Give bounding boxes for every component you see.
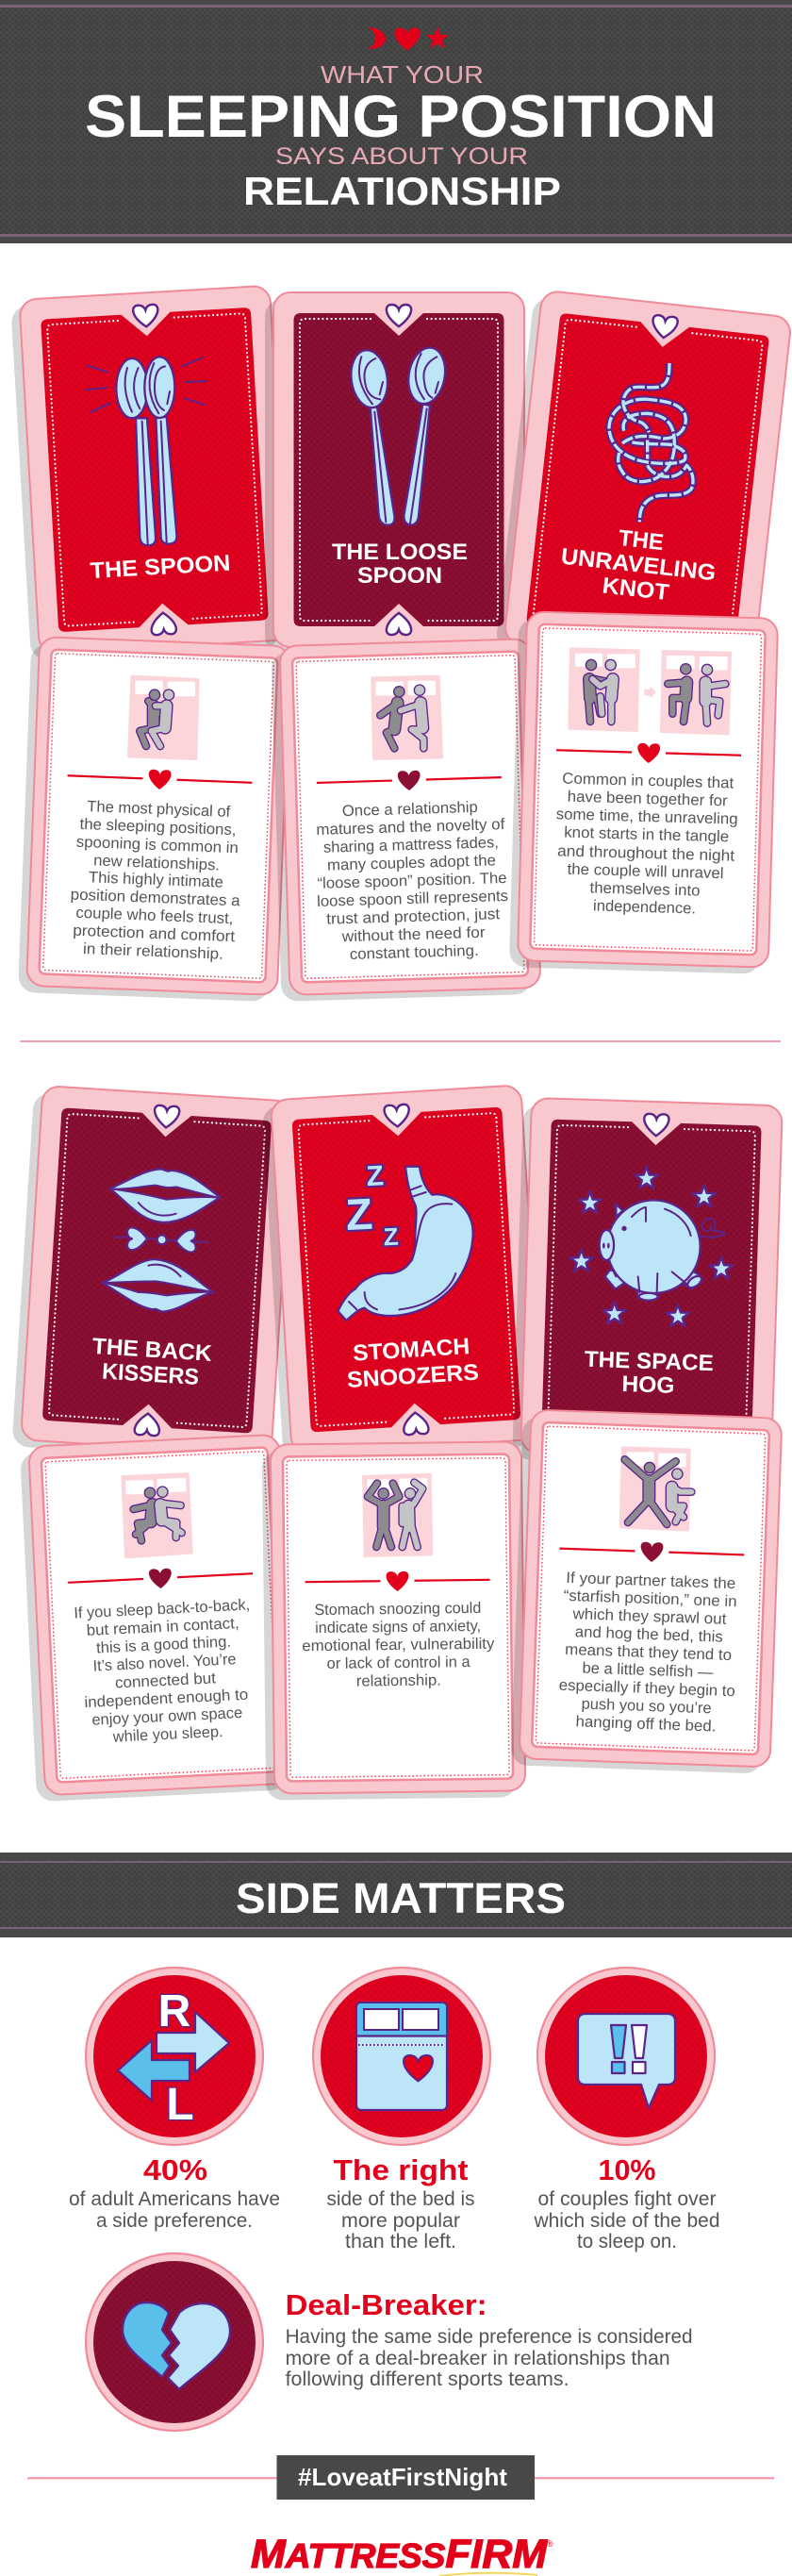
stat: 10% fight over side: 10% [598,2153,656,2186]
icon: moon heart star [368,26,449,51]
text: stomach snoozers: or lack of control in a [326,1654,471,1672]
card front: the unraveling knot [495,291,792,676]
text: space hog: means that they tend to [565,1641,732,1664]
card front: the loose spoon [265,292,524,654]
icon: stomach with sleeping Zs: Z [366,1160,385,1192]
stat: deal-breaker [86,2253,693,2431]
text: back kissers: while you sleep. [111,1723,223,1746]
hashtag bar [27,2455,774,2500]
card back: stomach snoozers description [262,1441,525,1801]
icon: back to back couple on bed [123,1474,191,1557]
text: loose spoon [314,798,510,964]
card front: stomach snoozers: STOMACH [353,1334,470,1367]
text: loose spoon: loose spoon still represents [317,888,508,910]
text: back kissers: this is a good thing. [96,1633,231,1656]
stat: 40% side preference: 40% [143,2153,207,2186]
text: unraveling knot: Common in couples that [562,770,734,792]
section banner: side matters [0,1853,792,1937]
text: loose spoon: sharing a mattress fades, [323,834,499,856]
text: loose spoon: constant touching. [350,942,479,963]
text: back kissers: independent enough to [84,1687,249,1711]
hashtag bar: #LoveatFirstNight [298,2463,507,2491]
title: SAYS ABOUT YOUR [275,143,528,170]
text: unraveling knot: some time, the unraveling [555,806,738,828]
icon: starfish sleeper on bed [620,1448,691,1530]
text: loose spoon: without the need for [340,924,486,945]
text: space hog: push you so you’re [581,1696,712,1717]
text: unraveling knot: knot starts in the tangle [564,824,729,845]
text: loose spoon: trust and protection, just [326,906,501,928]
card front: the unraveling knot: UNRAVELING [560,543,718,586]
card back: the unraveling knot description [509,611,778,974]
icon: bed with heart [356,2003,447,2110]
card front: stomach snoozers [262,1085,542,1461]
text: unraveling knot: independence. [593,897,696,917]
icon: loose spoon couple on bed [372,676,441,758]
text: spoon: spooning is common in [76,834,239,856]
text: spoon: This highly intimate [89,869,223,891]
text: back kissers: If you sleep back-to-back, [74,1596,251,1622]
icon: two spoons [86,357,206,545]
icon: spooning couple on bed [129,676,198,758]
text: spoon: protection and comfort [73,922,236,945]
text: space hog: and hog the bed, this [575,1623,723,1646]
stat: the right side [313,1968,490,2252]
title [85,60,717,213]
stat: 10% fight over side: of couples fight over [537,2188,717,2210]
icon: stomach sleepers on bed [364,1474,432,1555]
text: back kissers [74,1596,256,1747]
card front: the unraveling knot: THE [618,525,665,556]
stat: the right side: The right [334,2153,468,2186]
text: space hog: If your partner takes the [566,1570,736,1592]
stat: 10% fight over side: to sleep on. [577,2231,677,2252]
stat: 10% fight over side: which side of the bed [534,2210,720,2232]
stat: 40% side preference: a side preference. [96,2210,253,2232]
text: unraveling knot: and throughout the night [557,842,735,865]
card front: the back kissers: THE BACK [91,1334,213,1367]
icon: floating pig and stars [570,1167,733,1326]
text: unraveling knot: have been together for [568,789,728,809]
card front: the spoon: THE SPOON [90,551,231,584]
text: spoon: the sleeping positions, [79,816,237,839]
text: unraveling knot [553,770,739,919]
icon: lips and bone hearts [102,1169,220,1312]
text: back kissers: enjoy your own space [91,1704,243,1729]
text: loose spoon: matures and the novelty of [316,816,505,839]
title: SLEEPING POSITION [85,84,717,150]
icon: left and right arrows [118,1986,229,2130]
icon: couple untangling on two beds [569,649,730,734]
card back: the back kissers description [20,1435,296,1802]
card front: the loose spoon: THE LOOSE [332,540,468,565]
icon: left and right arrows: R [158,1986,190,2036]
icon: tangled knot [609,363,693,522]
icon: stomach with sleeping Zs: Z [344,1189,373,1239]
text: spoon: couple who feels trust, [75,905,234,927]
text: unraveling knot: themselves into [589,879,701,900]
text: back kissers: but remain in contact, [86,1615,239,1639]
card front: the space hog [512,1098,783,1467]
header banner [0,0,792,243]
card back: the spoon description [18,637,290,1002]
stat: deal-breaker: following different sports teams. [286,2368,569,2390]
stat: the right side: than the left. [345,2231,456,2252]
text: stomach snoozers: indicate signs of anxiety, [315,1618,481,1637]
card front: the loose spoon: SPOON [357,563,442,589]
text: space hog [557,1570,739,1736]
title: RELATIONSHIP [243,169,561,213]
stat: the right side: side of the bed is [326,2188,475,2210]
card front: the space hog: HOG [621,1371,675,1399]
icon: stomach with sleeping Zs: Z [383,1222,399,1251]
text: unraveling knot: the couple will unravel [567,861,724,882]
card front: the spoon [10,286,290,660]
icon: speech bubble with exclamation marks [578,2014,675,2108]
card front: the space hog: THE SPACE [584,1347,714,1376]
logo: Mattress Firm: ® [547,2539,553,2549]
section banner: side matters: SIDE MATTERS [236,1874,566,1922]
text: back kissers: connected but [115,1670,217,1692]
text: spoon: The most physical of [87,798,231,821]
text: back kissers: It’s also novel. You’re [92,1651,237,1675]
text: space hog: especially if they begin to [559,1677,735,1700]
text: stomach snoozers: emotional fear, vulnerability [302,1636,495,1654]
text: space hog: “starfish position,” one in [563,1587,737,1610]
card front: the back kissers [11,1086,293,1462]
stat: deal-breaker: Having the same side preference is considered [286,2326,693,2348]
logo: Mattress Firm: MATTRESSFIRM [251,2532,548,2576]
card front: the back kissers: KISSERS [101,1359,200,1390]
divider line [20,1040,781,1042]
card front: stomach snoozers: SNOOZERS [346,1360,480,1393]
text: loose spoon: many couples adopt the [327,852,496,874]
stat: 10% fight over side [534,1968,720,2252]
text: spoon: in their relationship. [83,940,223,963]
icon: stomach with sleeping Zs [338,1160,473,1321]
icon: broken heart [123,2302,230,2389]
text: spoon: new relationships. [93,852,220,874]
text: stomach snoozers [302,1600,496,1690]
card back: the loose spoon description [272,639,540,1002]
text: loose spoon: Once a relationship [342,799,478,820]
title: WHAT YOUR [321,60,484,89]
icon: left and right arrows: L [166,2080,194,2130]
text: stomach snoozers: Stomach snoozing could [314,1600,481,1619]
stat: 40% side preference [69,1968,280,2232]
text: stomach snoozers: relationship. [356,1671,441,1690]
stat: the right side: more popular [341,2210,460,2232]
text: loose spoon: “loose spoon” position. The [317,870,507,892]
text: space hog: be a little selfish — [582,1660,714,1681]
text: spoon: position demonstrates a [70,886,241,909]
icon: two separated spoons [348,344,450,525]
text: space hog: hanging off the bed. [575,1713,717,1736]
stat: 40% side preference: of adult Americans have [69,2188,280,2210]
stat: deal-breaker: Deal-Breaker: [286,2288,487,2321]
text: space hog: which they sprawl out [571,1605,727,1628]
stat: deal-breaker: more of a deal-breaker in relationships than [286,2348,670,2369]
text: spoon [68,798,244,963]
card front: the unraveling knot: KNOT [601,573,670,606]
card back: the space hog description [511,1409,782,1774]
